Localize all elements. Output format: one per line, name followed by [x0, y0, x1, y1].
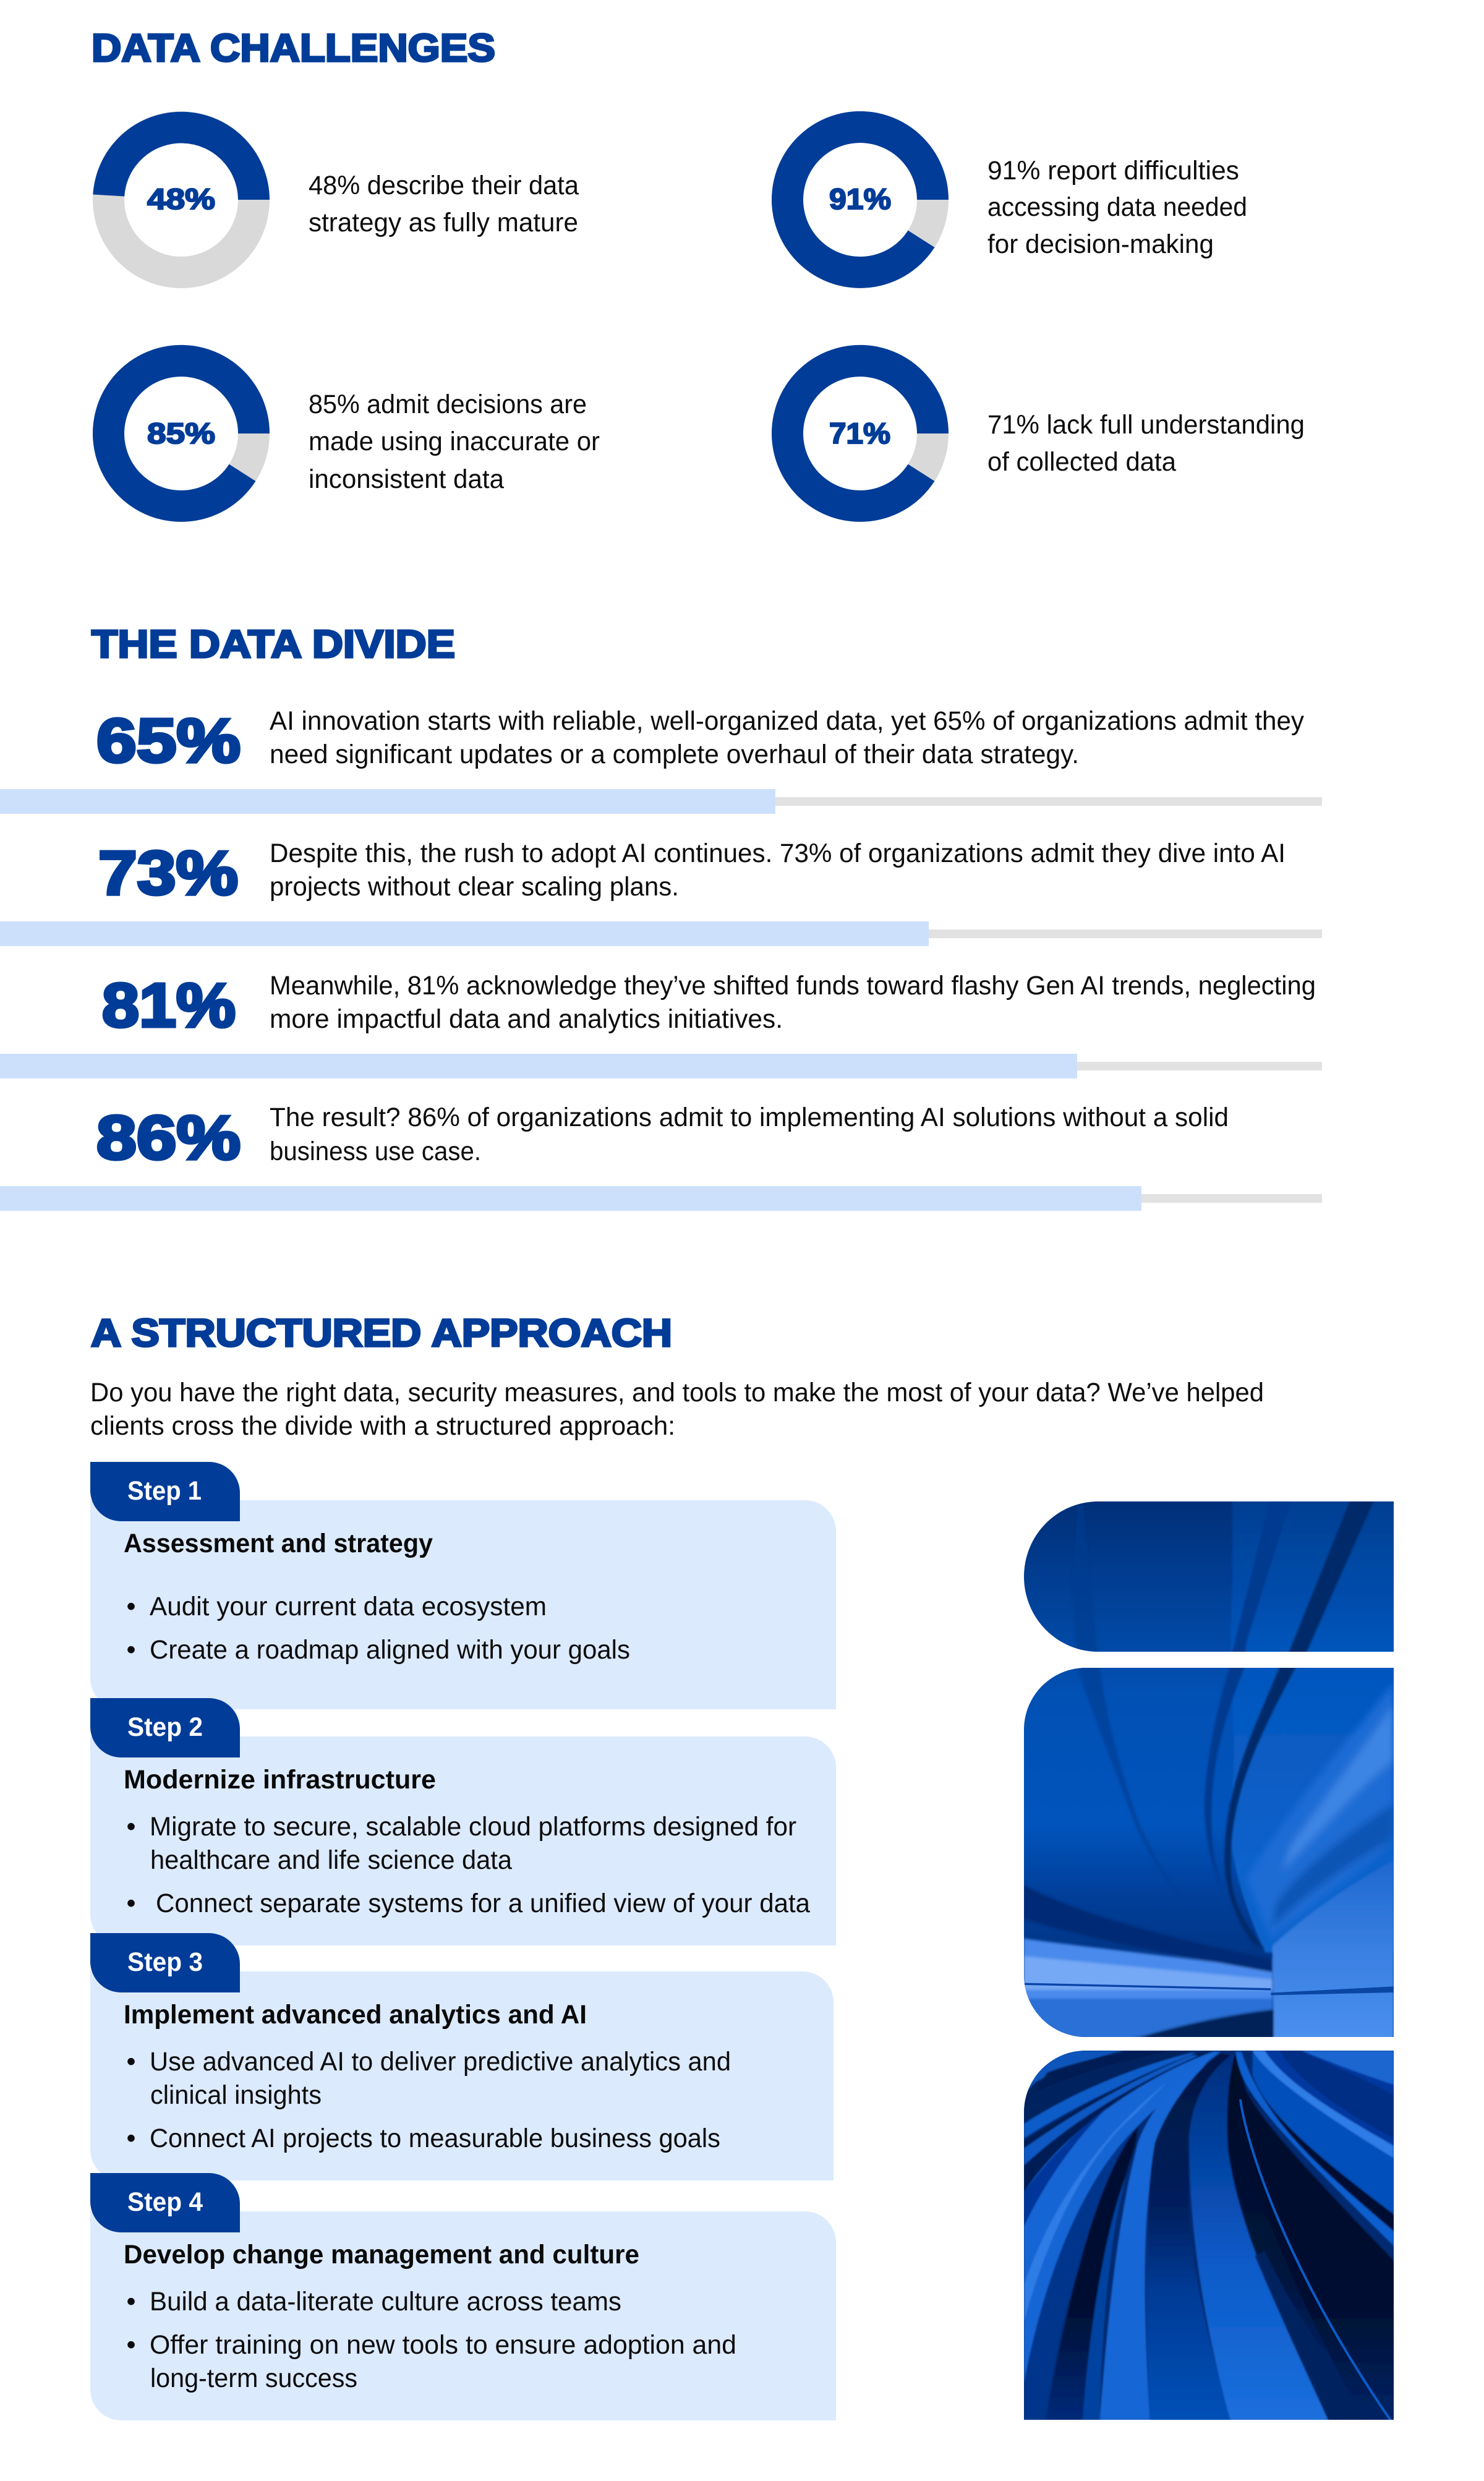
- panel: step 1: •: [126, 1635, 136, 1665]
- panel: step 1: Step 1: [127, 1476, 202, 1506]
- stat row: 81%: more impactful data and analytics initiatives.: [270, 1004, 783, 1034]
- image: motion blur tunnel, middle panel: [989, 1484, 1431, 2070]
- stat row: 81%: 81%: [102, 971, 236, 1040]
- heading: data challenges: DATA CHALLENGES: [92, 27, 495, 70]
- stat row: 65%: [0, 706, 1322, 814]
- panel: step 3: Implement advanced analytics and AI: [124, 2000, 587, 2030]
- panel: the data divide stats: [0, 706, 1322, 1211]
- panel: step 4: Step 4: [127, 2187, 203, 2217]
- text: 91% description: 91% report difficulties: [987, 156, 1239, 186]
- panel: step 4: •: [126, 2287, 136, 2317]
- text: 71% description: of collected data: [987, 447, 1176, 477]
- donut chart: 48%: 48%: [147, 182, 215, 215]
- panel: step 4: Develop change management and culture: [124, 2240, 639, 2270]
- text: 91% description: for decision-making: [987, 229, 1214, 259]
- text: structured approach intro: clients cross the divide with a structured approach:: [90, 1411, 675, 1441]
- text: 48% description: strategy as fully mature: [309, 208, 578, 237]
- text: 71% description: [987, 410, 1305, 477]
- text: 48% description: 48% describe their data: [309, 171, 579, 200]
- panel: step 4: Build a data-literate culture across teams: [150, 2287, 621, 2317]
- text: 48% description: [309, 171, 579, 237]
- panel: step 2: Migrate to secure, scalable cloud platforms designed for: [150, 1812, 796, 1842]
- panel: step 2: [90, 1698, 836, 1945]
- text: structured approach intro: Do you have the right data, security measures, and tools to make the most of your data? We’ve helped: [90, 1378, 1264, 1407]
- stat row: 73%: 73%: [98, 839, 238, 908]
- panel: step 3: Step 3: [127, 1947, 203, 1977]
- panel: step 3: [90, 1933, 834, 2180]
- stat row: 86%: 86%: [96, 1103, 241, 1172]
- panel: step 3: •: [126, 2047, 136, 2077]
- donut chart: 91%: 91%: [829, 182, 891, 215]
- stat row: 73%: Despite this, the rush to adopt AI continues. 73% of organizations admit they dive into AI: [270, 839, 1286, 868]
- donut chart: 71%: 71%: [829, 417, 890, 450]
- stat row: 86%: The result? 86% of organizations admit to implementing AI solutions without a solid: [270, 1103, 1229, 1132]
- text: 91% description: [987, 156, 1247, 259]
- image: blue light streaks, bottom panel: [1020, 2048, 1397, 2422]
- panel: step 2: Connect separate systems for a unified view of your data: [156, 1889, 810, 1918]
- stat row: 73%: [0, 839, 1322, 946]
- panel: step 2: Modernize infrastructure: [124, 1765, 436, 1795]
- panel: step 1: •: [126, 1592, 136, 1621]
- donut chart: 85%: [93, 345, 270, 522]
- panel: step 2: Step 2: [127, 1712, 203, 1742]
- panel: step 3: •: [126, 2124, 136, 2153]
- donut chart: 85%: 85%: [147, 417, 215, 450]
- panel: step 4: Offer training on new tools to ensure adoption and: [150, 2330, 736, 2360]
- stat row: 65%: need significant updates or a complete overhaul of their data strategy.: [270, 740, 1079, 769]
- panel: step 4: •: [126, 2330, 136, 2360]
- image: motion blur tunnel, top pill: [1024, 1501, 1394, 1986]
- panel: step 4: [90, 2173, 836, 2420]
- text: 71% description: 71% lack full understanding: [987, 410, 1305, 440]
- text: 91% description: accessing data needed: [987, 192, 1247, 222]
- stat row: 81%: [0, 971, 1322, 1078]
- panel: step 2: •: [126, 1812, 136, 1842]
- panel: step 3: Connect AI projects to measurable business goals: [150, 2124, 720, 2153]
- panel: step 1: Create a roadmap aligned with your goals: [150, 1635, 630, 1665]
- stat row: 86%: [0, 1103, 1322, 1211]
- stat row: 86%: business use case.: [270, 1137, 481, 1166]
- heading: the data divide: THE DATA DIVIDE: [92, 623, 455, 666]
- panel: data challenges donuts: [93, 111, 1305, 522]
- text: 85% description: made using inaccurate or: [309, 427, 600, 456]
- heading: a structured approach: A STRUCTURED APPROACH: [91, 1312, 672, 1355]
- donut chart: 48%: [93, 112, 270, 272]
- donut chart: 91%: [772, 111, 949, 288]
- text: 85% description: 85% admit decisions are: [309, 390, 587, 419]
- panel: step 3: Use advanced AI to deliver predictive analytics and: [150, 2047, 731, 2077]
- panel: step 3: clinical insights: [150, 2080, 322, 2110]
- text: 85% description: inconsistent data: [309, 464, 504, 494]
- stat row: 65%: AI innovation starts with reliable, well-organized data, yet 65% of organizations admit they: [270, 706, 1304, 736]
- text: structured approach intro: [90, 1378, 1264, 1441]
- panel: step 1: Assessment and strategy: [124, 1529, 433, 1558]
- stat row: 65%: 65%: [96, 706, 241, 775]
- panel: step 4: long-term success: [150, 2364, 357, 2393]
- stat row: 81%: Meanwhile, 81% acknowledge they’ve shifted funds toward flashy Gen AI trends, neglecting: [270, 971, 1316, 1001]
- stat row: 73%: projects without clear scaling plans.: [270, 872, 679, 902]
- panel: step 2: healthcare and life science data: [150, 1845, 512, 1875]
- text: 85% description: [309, 390, 600, 494]
- panel: step 2: •: [126, 1889, 136, 1918]
- donut chart: 71%: [772, 345, 949, 522]
- panel: step 1: Audit your current data ecosystem: [150, 1592, 547, 1621]
- panel: step 1: [90, 1462, 836, 1709]
